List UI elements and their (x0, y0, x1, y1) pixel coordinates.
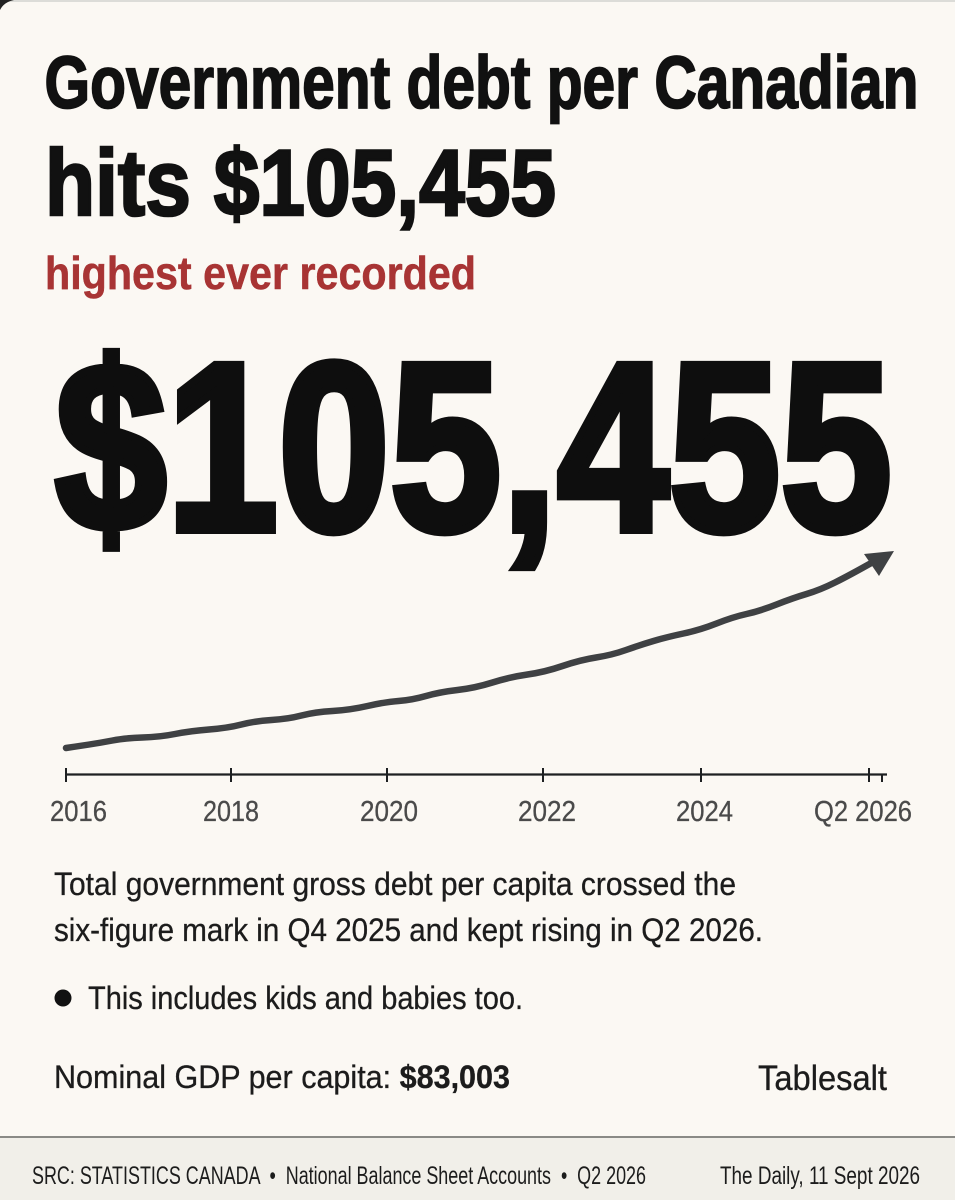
axis labels: 2016 (50, 796, 107, 828)
title line 2: hits $105,455 (45, 130, 556, 235)
subtitle: highest ever recorded (45, 247, 476, 299)
axis labels (50, 796, 912, 828)
trend line (66, 562, 873, 748)
time axis (66, 768, 887, 782)
axis labels: 2024 (676, 796, 733, 828)
axis labels: 2022 (518, 796, 576, 828)
axis labels: 2018 (203, 796, 259, 828)
GDP stat: Nominal GDP per capita: $83,003 (54, 1059, 510, 1095)
description text: six-figure mark in Q4 2025 and kept rising in Q2 2026. (54, 912, 763, 948)
brand name: Tablesalt (758, 1059, 887, 1098)
axis labels: 2020 (360, 796, 418, 828)
axis labels: Q2 2026 (814, 796, 912, 828)
source line: SRC: STATISTICS CANADA • National Balance Sheet Accounts • Q2 2026 (32, 1162, 646, 1190)
footer band (0, 1136, 955, 1200)
description text: Total government gross debt per capita crossed the (54, 866, 736, 902)
description text (54, 866, 763, 948)
line chart (50, 551, 912, 828)
arrow head (864, 551, 894, 576)
bullet note: This includes kids and babies too. (88, 980, 523, 1016)
